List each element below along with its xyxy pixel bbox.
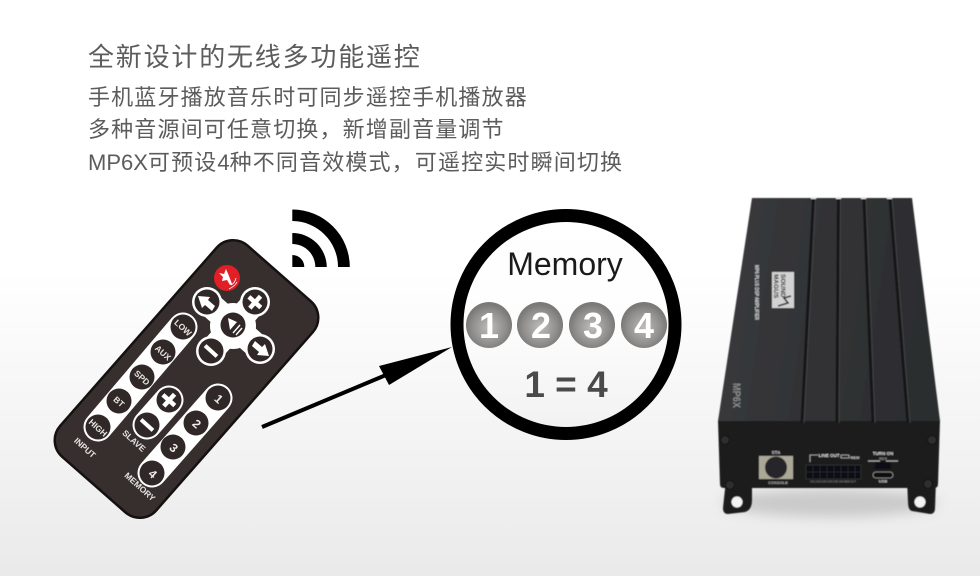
memory number balls: 2	[531, 305, 551, 346]
line out connector: REM	[851, 455, 860, 460]
input button group: AUX	[153, 343, 173, 363]
console port: STA	[772, 450, 781, 455]
ground shadow	[722, 489, 938, 517]
memory callout circle	[457, 216, 675, 434]
playback button cluster	[192, 287, 275, 366]
screws	[720, 436, 936, 490]
remote group labels	[72, 428, 158, 503]
feature line 3: MP6X可预设4种不同音效模式，可遥控实时瞬间切换	[88, 150, 623, 175]
memory number balls	[466, 302, 667, 348]
input button group: SPD	[132, 368, 152, 387]
remote control	[46, 231, 327, 527]
memory button group	[140, 386, 230, 486]
red power button	[214, 265, 240, 291]
memory button group: 1	[212, 392, 226, 407]
heading text block	[88, 42, 623, 175]
feature line 2: 多种音源间可任意切换，新增副音量调节	[88, 117, 505, 142]
line out connector	[806, 453, 861, 484]
input button group: LOW	[172, 317, 194, 339]
memory button group: 4	[146, 467, 160, 482]
arrow	[262, 347, 452, 427]
console port	[759, 450, 793, 485]
memory number balls: 3	[583, 305, 603, 346]
line out connector: LINE OUT	[818, 453, 840, 458]
memory number balls: 4	[634, 305, 654, 346]
input button group: HIGH	[87, 417, 109, 439]
top face	[718, 198, 940, 421]
brand plate: SOUND	[779, 274, 786, 298]
memory button group: 2	[190, 417, 204, 432]
brand plate	[772, 272, 794, 308]
input button group: BT	[111, 394, 127, 410]
memory label: Memory	[507, 246, 623, 282]
mounting feet	[723, 480, 936, 514]
input button group	[86, 314, 196, 440]
memory button group: 3	[167, 441, 181, 456]
turn on switch and USB port: REM	[879, 457, 887, 461]
cooling grooves	[802, 198, 910, 423]
model name: MP6X	[730, 383, 742, 409]
remote group labels: INPUT	[72, 436, 98, 461]
turn on switch and USB port: USB	[879, 478, 887, 484]
title: 全新设计的无线多功能遥控	[88, 42, 422, 72]
remote group labels: MEMORY	[123, 470, 158, 503]
front panel	[718, 420, 940, 488]
remote body	[46, 231, 327, 527]
product description: MP6 PLUS DSP AMPLIFIER	[753, 265, 759, 320]
feature line 1: 手机蓝牙播放音乐时可同步遥控手机播放器	[88, 85, 528, 110]
brand plate: MAGUS	[772, 274, 779, 299]
icon: wireless signal	[292, 210, 350, 267]
line out connector: CH1 CH2 CH3 CH4 CH5 CH6 REM OUT	[810, 480, 856, 484]
turn on switch and USB port	[868, 451, 898, 484]
turn on switch and USB port: TURN ON	[873, 451, 893, 456]
memory number balls: 1	[479, 305, 499, 346]
console port: CONSOLE	[768, 480, 788, 485]
circle outline	[457, 216, 675, 434]
slave button group	[134, 388, 182, 438]
equation: 1 = 4	[524, 364, 608, 405]
product photo: MP6X amplifier	[718, 198, 940, 517]
remote group labels: SLAVE	[120, 428, 148, 454]
